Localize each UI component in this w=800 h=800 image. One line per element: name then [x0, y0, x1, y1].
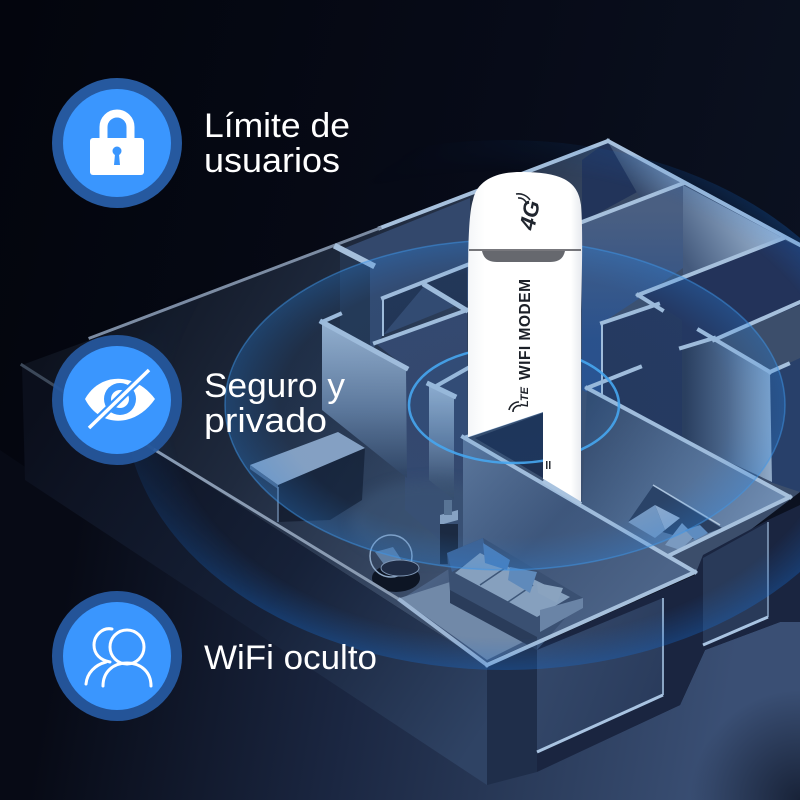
window: front edge — [662, 598, 664, 695]
exterior wall: front face — [537, 505, 800, 772]
label: Seguro y privado: privado — [204, 402, 327, 440]
modem grey slot — [482, 251, 565, 262]
feature: hidden WiFi — [52, 591, 377, 721]
right wall room — [582, 388, 790, 555]
feature: user limit — [52, 78, 350, 208]
centre corridor — [375, 310, 467, 560]
modem wifi arcs lower — [509, 402, 521, 412]
table — [250, 432, 365, 522]
window: right edge — [767, 522, 769, 617]
label: Límite de usuarios: Límite de — [204, 107, 350, 145]
ground dark corner — [690, 690, 800, 800]
wall block: small column — [429, 384, 454, 500]
modem label 4G: 4G — [514, 198, 545, 233]
stub room — [602, 304, 682, 445]
apartment floor plan — [22, 140, 800, 785]
back room: centre — [582, 185, 683, 400]
icon: padlock — [52, 78, 182, 208]
exterior wall: corner column — [487, 645, 537, 785]
bench with pillows — [628, 485, 722, 550]
side table with lamp — [440, 500, 458, 564]
back room: lit wall right — [683, 185, 783, 278]
icon: users — [52, 591, 182, 721]
feature: secure and private — [52, 335, 345, 465]
wall block: right large — [682, 340, 772, 482]
front wall top redraw — [543, 481, 581, 504]
right edge room — [770, 358, 800, 492]
modem status light — [546, 461, 550, 469]
wall block: upper T — [340, 250, 370, 345]
panel: feature list — [52, 78, 377, 721]
modem label LTE: LTE — [519, 386, 531, 407]
modem — [468, 172, 582, 510]
front room opening — [475, 413, 543, 478]
ground under the building — [0, 450, 800, 800]
modem label WIFI MODEM: WIFI MODEM — [517, 279, 534, 380]
label: Límite de usuarios: usuarios — [204, 142, 340, 180]
living room wall and floor — [400, 437, 695, 662]
modem body — [468, 172, 582, 510]
window: right — [703, 522, 768, 645]
glow: inner wifi ring — [409, 347, 619, 463]
modem cap seam — [469, 249, 581, 251]
armchair — [370, 535, 420, 592]
label: WiFi oculto: WiFi oculto — [204, 639, 377, 677]
back room: dark right — [640, 240, 800, 440]
glow: outer wifi ring — [125, 140, 800, 670]
window: right sill — [703, 617, 768, 645]
back room: lit wall — [608, 142, 683, 198]
back room centre left — [340, 198, 470, 350]
window: front sill — [537, 695, 663, 752]
sofa — [447, 538, 583, 650]
wall block: centre left — [322, 322, 407, 478]
wall tops — [22, 141, 800, 665]
rug floor — [400, 582, 533, 660]
window: front — [537, 598, 663, 752]
back room: dark corner — [582, 141, 650, 222]
icon: crossed eye — [52, 335, 182, 465]
back room small — [383, 265, 467, 335]
modem wifi arcs — [516, 194, 530, 202]
floor: main apartment slab — [22, 141, 800, 665]
glow: large wifi ring — [225, 240, 785, 570]
room floor glow — [350, 480, 510, 560]
label: Seguro y privado: Seguro y — [204, 367, 345, 405]
front room opening top — [465, 410, 545, 437]
exterior wall: left face — [22, 365, 487, 785]
